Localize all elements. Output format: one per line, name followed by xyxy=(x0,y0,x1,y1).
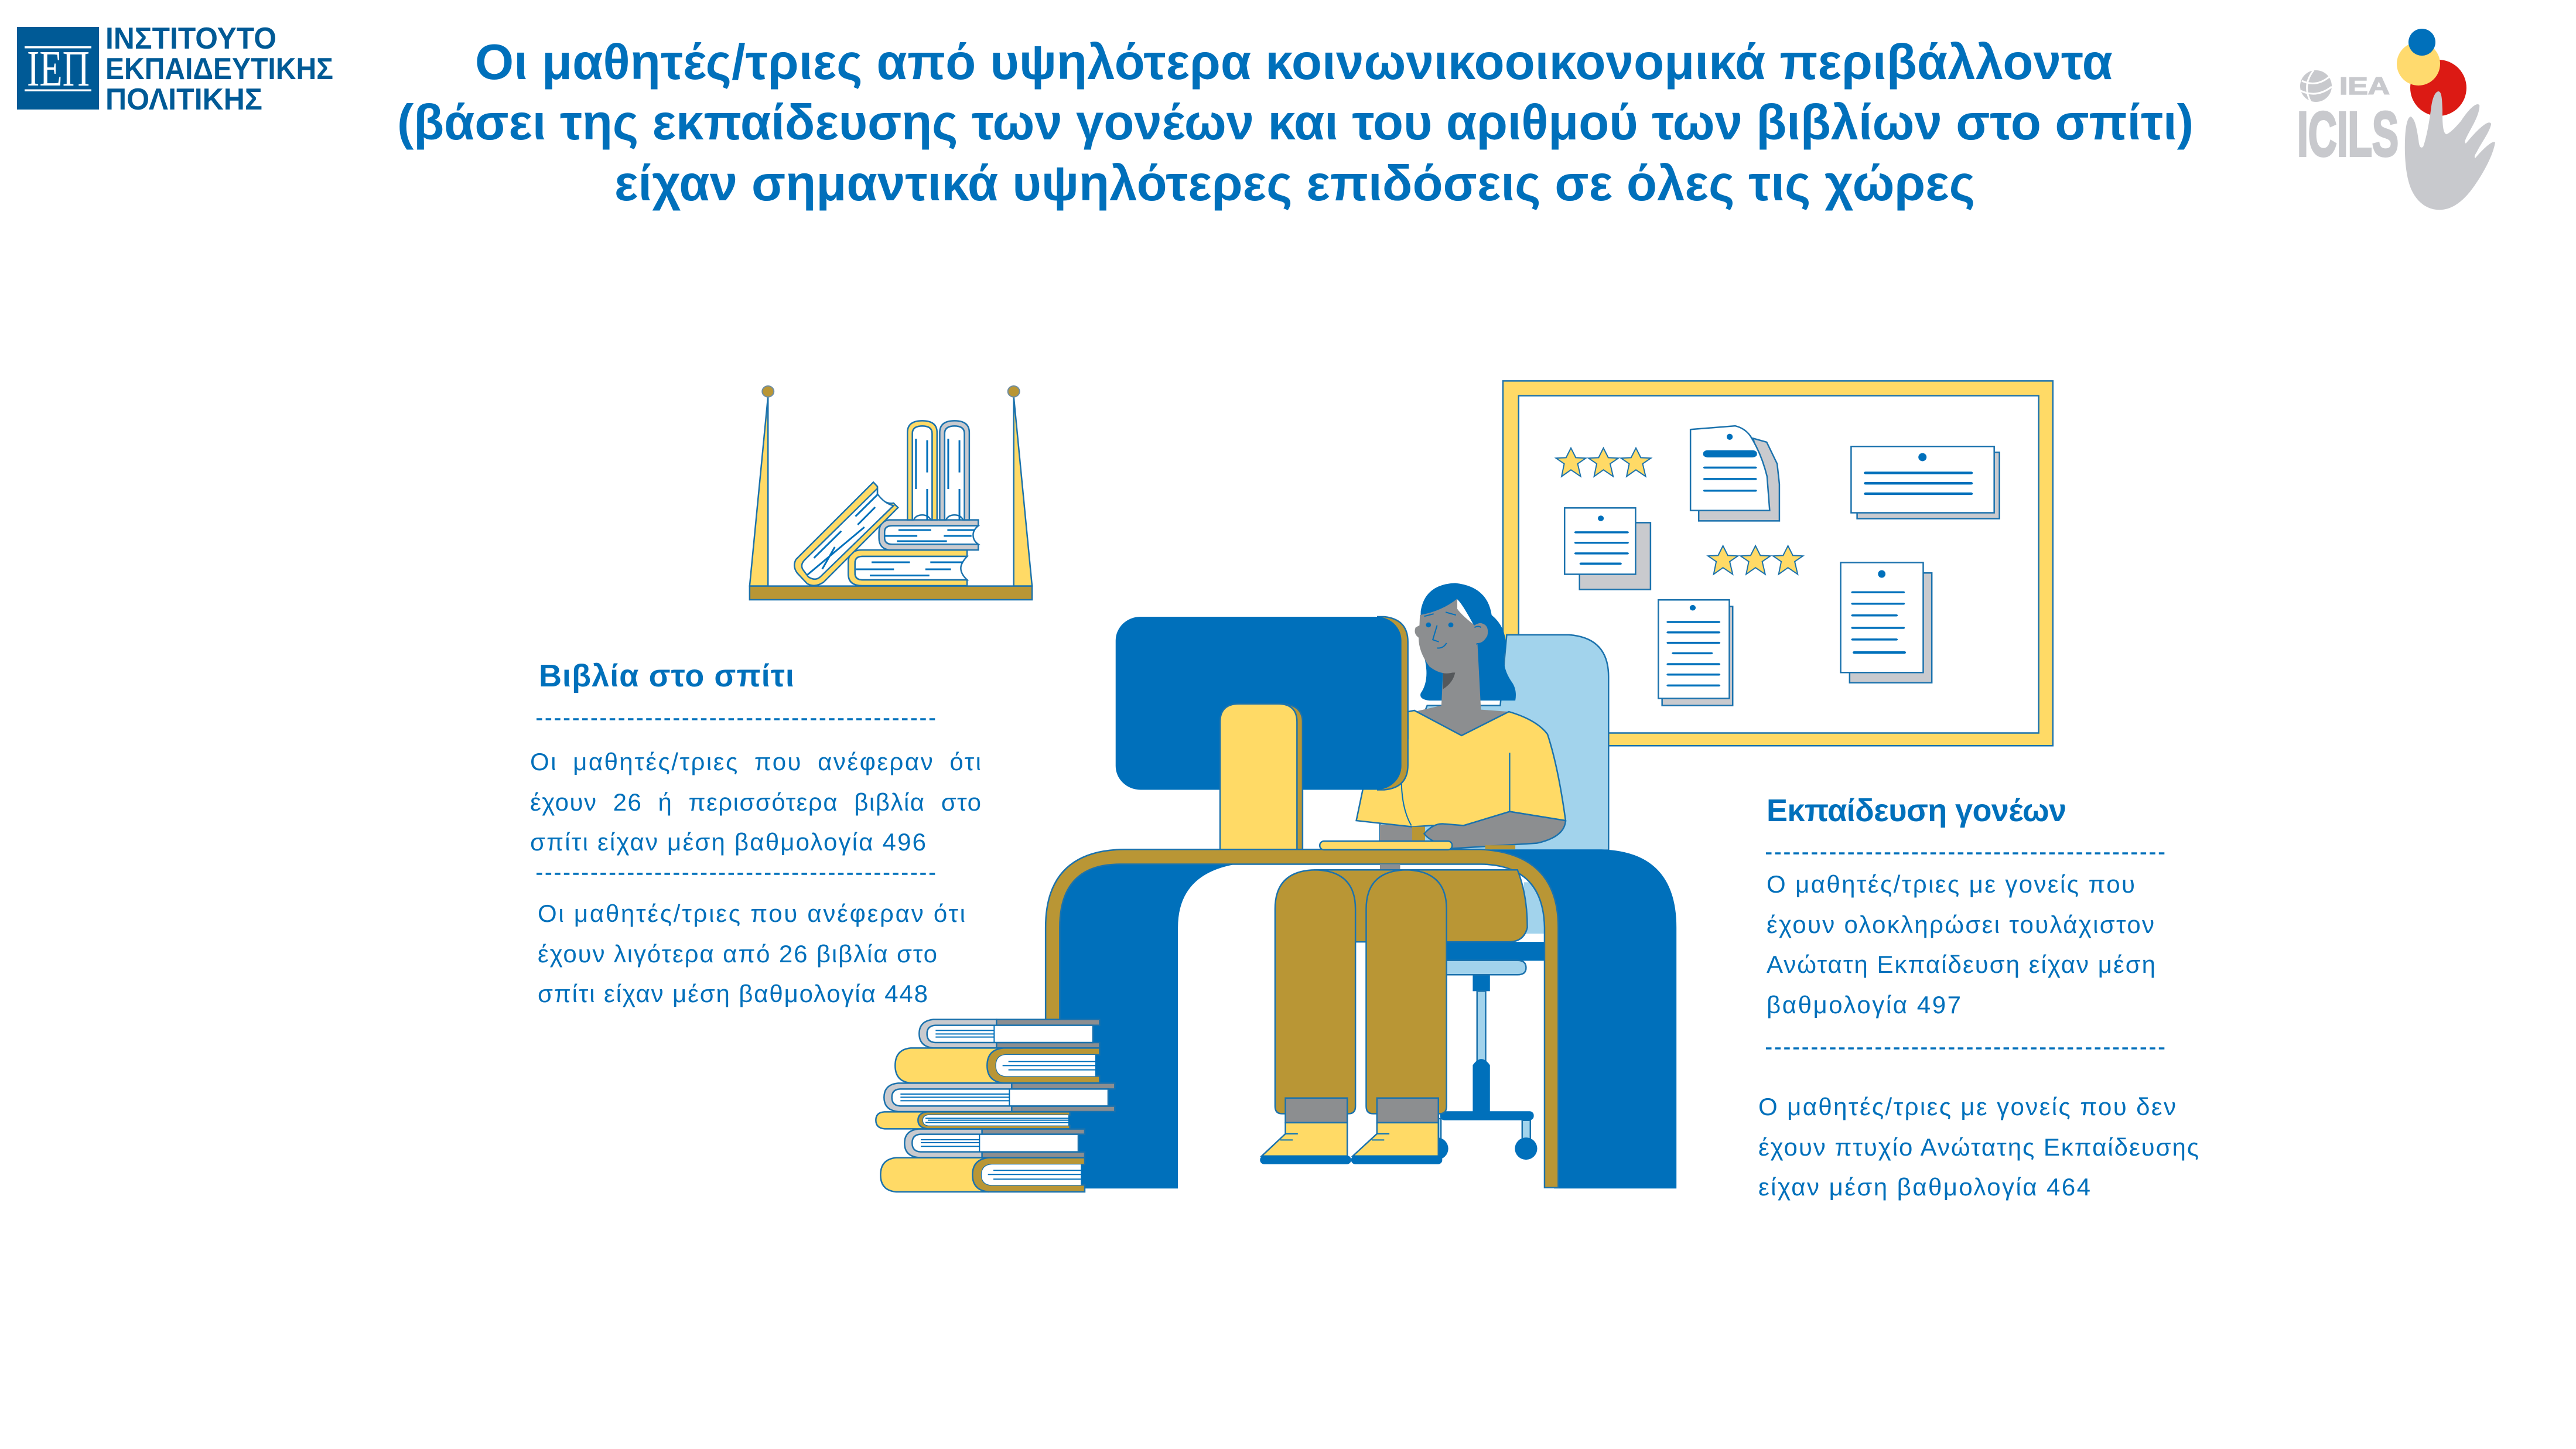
book 3 grey xyxy=(884,1083,1115,1112)
book 4 yellow and gold xyxy=(876,1112,1070,1129)
text: 26 or more books, score 496: Οι μαθητές/τριες που ανέφεραν ότι xyxy=(530,748,981,775)
illustration: student at desk with computer xyxy=(1046,583,1676,1188)
text: fewer than 26 books, score 448 xyxy=(538,900,965,1007)
text: parents with higher education, score 497: Ο μαθητές/τριες με γονείς που xyxy=(1767,870,2135,898)
noticeboard with notes and stars xyxy=(1503,381,2053,746)
book 5 grey xyxy=(904,1129,1085,1157)
icon: stack of books xyxy=(876,1020,1115,1192)
text: fewer than 26 books, score 448: σπίτι είχαν μέση βαθμολογία 448 xyxy=(538,980,928,1007)
stars centre xyxy=(1708,546,1803,574)
icon: bookshelf with books xyxy=(750,386,1032,600)
title: Οι μαθητές/τριες από υψηλότερα κοινωνικοοικονομικά περιβάλλοντα xyxy=(475,35,2113,90)
logo: IEA ICILS xyxy=(2297,29,2495,210)
stars top left xyxy=(1556,448,1651,476)
logo: Institute of Educational Policy: ΕΚΠΑΙΔΕΥΤΙΚΗΣ xyxy=(105,52,333,86)
book 1 grey xyxy=(919,1020,1099,1048)
tall note right xyxy=(1841,563,1932,683)
title xyxy=(397,35,2194,211)
logo: Institute of Educational Policy: ΙΕΠ xyxy=(27,40,90,97)
book 2 yellow and gold xyxy=(895,1048,1099,1083)
title: (βάσει της εκπαίδευσης των γονέων και του αριθμού των βιβλίων στο σπίτι) xyxy=(397,95,2194,151)
logo: IEA ICILS: ICILS xyxy=(2297,98,2399,169)
chair xyxy=(1380,635,1608,1160)
text: 26 or more books, score 496: σπίτι είχαν μέση βαθμολογία 496 xyxy=(530,828,926,856)
title: είχαν σημαντικά υψηλότερες επιδόσεις σε όλες τις χώρες xyxy=(614,156,1975,211)
logo: Institute of Educational Policy xyxy=(17,22,333,117)
text: parents with higher education, score 497: Ανώτατη Εκπαίδευση είχαν μέση xyxy=(1767,951,2155,978)
wide note xyxy=(1851,446,2000,518)
text: parents with higher education, score 497 xyxy=(1767,870,2155,1019)
tall note centre xyxy=(1658,600,1733,706)
student xyxy=(1260,583,1566,1164)
logo: Institute of Educational Policy: ΙΝΣΤΙΤΟΥΤΟ xyxy=(105,22,276,56)
logo: IEA ICILS: IEA xyxy=(2339,72,2390,100)
text: 26 or more books, score 496: έχουν 26 ή περισσότερα βιβλία στο xyxy=(530,788,981,816)
computer monitor xyxy=(1116,617,1408,849)
logo: Institute of Educational Policy: ΠΟΛΙΤΙΚΗΣ xyxy=(105,83,262,117)
note with curled corner xyxy=(1690,426,1779,521)
heading: books at home: Βιβλία στο σπίτι xyxy=(539,658,794,693)
text: fewer than 26 books, score 448: έχουν λιγότερα από 26 βιβλία στο xyxy=(538,940,937,968)
small note left xyxy=(1564,508,1651,589)
book 6 yellow and gold xyxy=(880,1158,1085,1192)
heading: parental education: Εκπαίδευση γονέων xyxy=(1767,793,2066,828)
text: parents without degree, score 464 xyxy=(1758,1093,2199,1201)
text: 26 or more books, score 496 xyxy=(530,748,981,856)
text: parents with higher education, score 497: έχουν ολοκληρώσει τουλάχιστον xyxy=(1767,911,2154,938)
text: parents without degree, score 464: Ο μαθητές/τριες με γονείς που δεν xyxy=(1758,1093,2176,1120)
text: parents without degree, score 464: έχουν πτυχίο Ανώτατης Εκπαίδευσης xyxy=(1758,1133,2199,1161)
text: parents with higher education, score 497: βαθμολογία 497 xyxy=(1767,991,1961,1019)
text: parents without degree, score 464: είχαν μέση βαθμολογία 464 xyxy=(1758,1173,2090,1201)
text: fewer than 26 books, score 448: Οι μαθητές/τριες που ανέφεραν ότι xyxy=(538,900,965,927)
desk xyxy=(1046,849,1676,1188)
